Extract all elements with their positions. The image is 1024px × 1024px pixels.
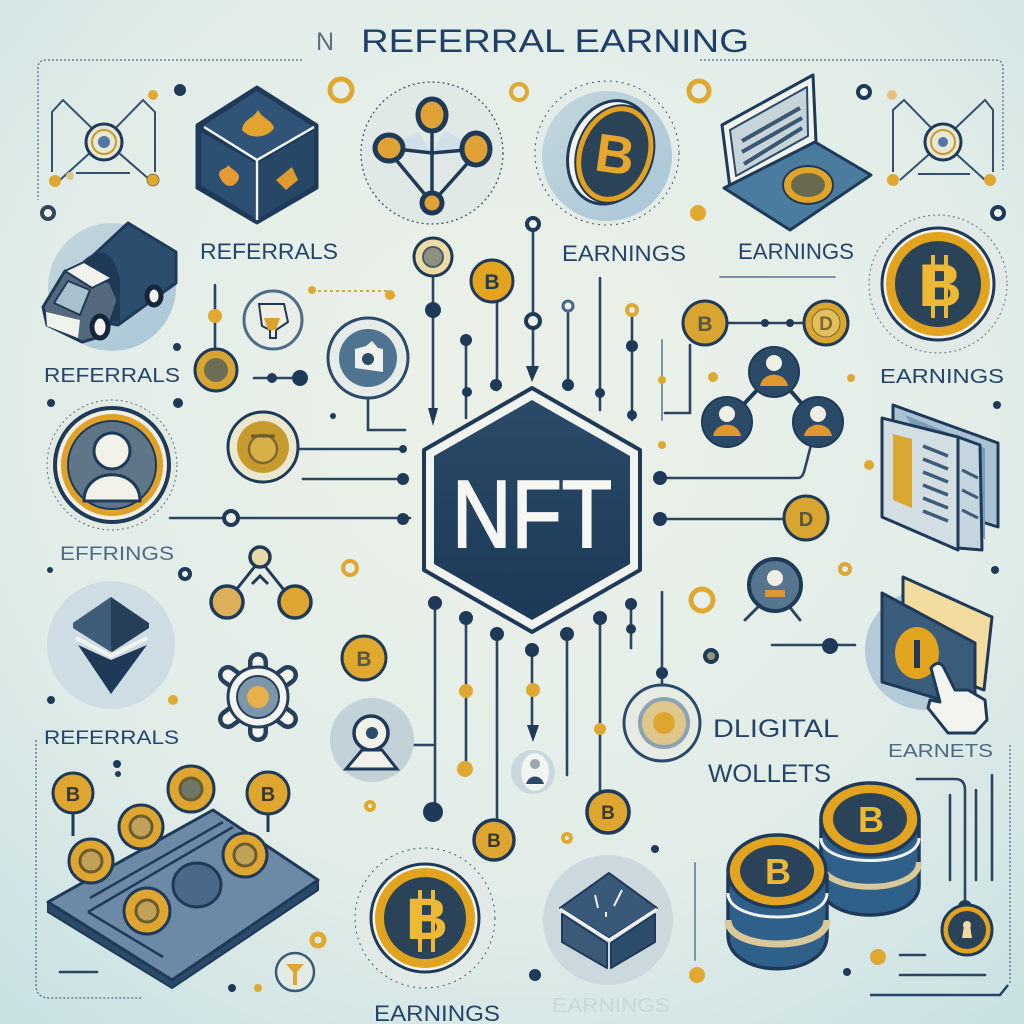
icon: wallet with hand [865,577,992,733]
icon: coin stacks: B [765,851,791,892]
icon: small coin top row [414,238,452,276]
icon: coin pair: D [819,314,833,335]
icon: coin top centre [535,81,679,225]
icon: NFT cube [197,87,317,223]
gold accent dots [312,79,850,946]
icon: coin pair: B [697,313,713,336]
icon: laptop [722,75,871,230]
label: effrings: EFFRINGS [60,544,174,565]
gold solid dots [148,90,886,992]
title: REFERRAL EARNING [361,23,749,59]
icon: connector triangle coins [211,547,311,618]
icon: box bottom [543,855,673,985]
icon: coin top right [869,215,1007,353]
icon: platform with coins [48,766,318,988]
icon: chain coin left [195,349,237,391]
title: N [316,28,334,56]
icon: truck [43,223,176,351]
label: earnings far right: EARNINGS [880,366,1004,388]
icon: coin with ring [624,685,700,761]
icon: small coin centre left [342,636,386,680]
icon: small coin centre left: B [356,648,372,671]
icon: small coin B [471,260,513,302]
panel: central NFT hexagon [424,388,640,632]
label: digital wallets: WOLLETS [708,760,831,788]
icon: books [882,405,998,550]
icon: coin ring left [228,412,298,482]
icon: puzzle badge [244,291,302,349]
label: digital wallets: DLIGITAL [713,715,839,743]
faint connector lines [350,277,835,960]
label: referrals left: REFERRALS [44,365,180,387]
label: earnets: EARNETS [888,741,993,761]
icon: coin pair [683,301,848,345]
icon: large coin bottom [355,848,495,988]
icon: coin stacks: B [858,799,884,840]
icon: platform with coins: B [66,784,80,806]
panel: central NFT hexagon: NFT [452,461,612,568]
icon: small coins bottom centre: B [487,831,501,852]
label: digital wallets [708,715,839,788]
icon: coin right of hexagon: D [799,509,813,531]
label: earnings right: EARNINGS [738,239,854,264]
label: referrals top: REFERRALS [200,239,338,264]
icon: network nodes [361,82,503,224]
icon: webcam user [330,698,414,782]
label: earnings centre: EARNINGS [562,241,686,266]
icon: large coin bottom: B [406,887,448,952]
icon: image badge [328,318,408,398]
envelope network icon left [49,100,159,187]
icon: coin stacks [728,783,919,969]
icon: platform with coins: B [261,784,275,806]
icon: padlock coin [942,900,992,955]
label: referrals lower left: REFERRALS [44,728,179,749]
icon: gear [228,662,288,732]
icon: small person [511,750,555,794]
icon: coin top centre: B [592,123,638,187]
connector lines [60,232,992,975]
icon: user pin [749,559,801,611]
icon: small pin coin [276,953,314,991]
envelope network icon right [887,90,996,186]
ring nodes [42,86,1004,662]
label: faded earnings: EARNINGS [552,995,670,1017]
icon: small coins bottom centre [474,791,629,860]
icon: coin top right: B [918,252,962,319]
icon: coin right of hexagon [784,496,828,540]
icon: small coins bottom centre: B [601,803,615,824]
icon: small coin B: B [484,271,500,294]
icon: user trio network [702,347,843,447]
icon: diamond shield [47,581,175,709]
icon: user badge [47,400,177,530]
